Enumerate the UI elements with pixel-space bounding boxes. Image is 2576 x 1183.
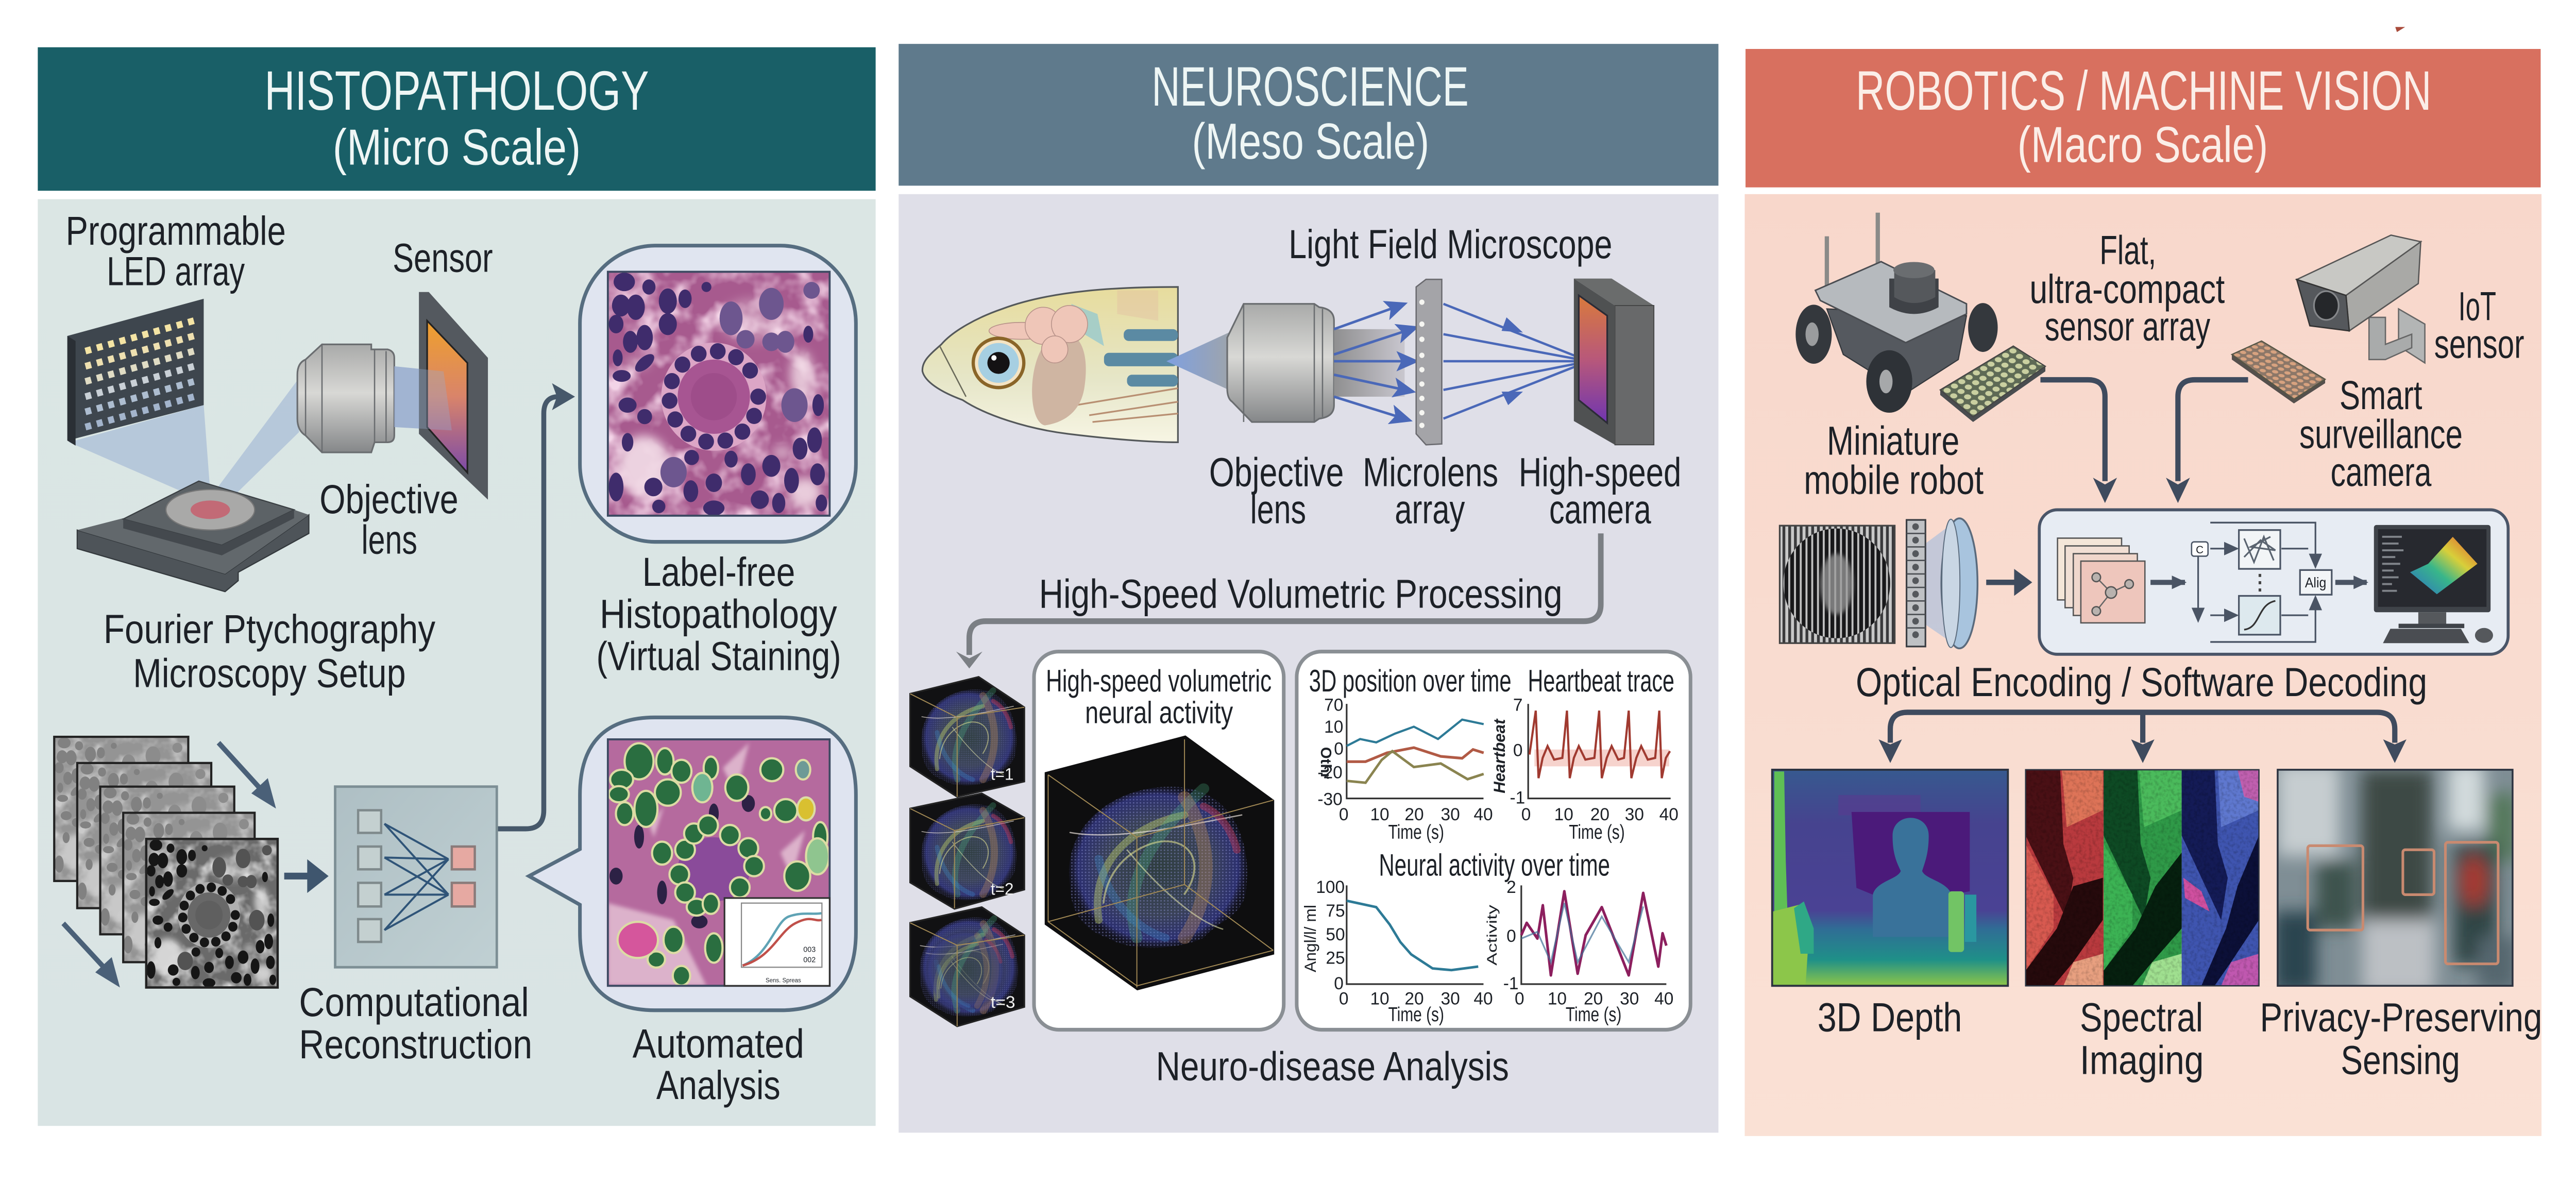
label: label-free histopathology: (Virtual Staining) — [597, 634, 841, 679]
labels: output modalities: 3D Depth — [1818, 995, 1962, 1040]
small stray mark — [2395, 27, 2405, 32]
volume t=1: t=1 — [991, 765, 1013, 784]
label: fourier ptychography setup: Fourier Ptychography — [104, 607, 435, 652]
volume t=1 — [910, 677, 1024, 797]
pipeline flow — [2150, 522, 2367, 642]
chart: heartbeat trace: Heartbeat trace — [1528, 664, 1674, 698]
label: fourier ptychography setup — [104, 607, 435, 696]
label: light field microscope: Light Field Microscope — [1289, 222, 1612, 267]
chart: heartbeat trace — [1490, 664, 1679, 843]
arrow: encoder to decoder — [1986, 569, 2032, 596]
arrows: decoding outputs — [1878, 713, 2406, 763]
icon: miniature mobile robot — [1795, 213, 1998, 413]
inset chart — [724, 898, 829, 986]
chart: heartbeat trace: 10 — [1554, 805, 1573, 824]
inset chart: 002 — [803, 956, 816, 964]
chart: 3D position over time: 40 — [1473, 805, 1493, 824]
labels: output modalities: Sensing — [2341, 1038, 2460, 1083]
image: 3D depth map — [1772, 770, 2008, 986]
chart: 3D position over time — [1309, 664, 1512, 843]
chart: neural activity right: 40 — [1654, 989, 1673, 1008]
chart: neural activity left: 50 — [1326, 924, 1345, 944]
label: programmable LED array — [66, 209, 286, 294]
label: IoT sensor: sensor — [2434, 322, 2524, 367]
card: high-speed volumetric neural activity: High-speed volumetric — [1046, 664, 1272, 698]
heading: neuroscience: NEUROSCIENCE — [1151, 55, 1469, 117]
chart: neural activity left: Time (s) — [1388, 1004, 1444, 1026]
card: time-series charts — [1297, 652, 1690, 1029]
label: flat ultra-compact sensor array — [2029, 228, 2225, 349]
label: objective lens: Objective — [319, 477, 459, 522]
label: programmable LED array: Programmable — [66, 209, 286, 254]
label: fourier ptychography setup: Microscopy Setup — [133, 651, 406, 696]
icon: robot sensor array — [1940, 346, 2045, 422]
ellipsis dots — [2259, 574, 2260, 593]
arrow: camera to volumes — [956, 533, 1601, 668]
label: flat ultra-compact sensor array: sensor array — [2045, 305, 2210, 349]
image: spectral imaging strips — [2026, 770, 2259, 986]
icon: monitor with 3D surface — [2374, 525, 2493, 643]
image: segmented tissue — [608, 739, 829, 986]
inset chart: Sens. Spreas — [766, 977, 801, 984]
icon: sensor — [394, 292, 488, 500]
chart: neural activity right: 20 — [1584, 989, 1603, 1008]
labels: output modalities: Imaging — [2080, 1038, 2204, 1083]
label: label-free histopathology: Histopathology — [600, 592, 837, 637]
heading: histopathology: (Micro Scale) — [333, 119, 581, 176]
label: automated analysis — [633, 1022, 804, 1108]
chart: 3D position over time: Time (s) — [1388, 821, 1444, 843]
heading: robotics / machine vision — [1745, 49, 2540, 188]
chart: neural activity left: 75 — [1326, 901, 1345, 921]
card: high-speed volumetric neural activity: neural activity — [1085, 695, 1233, 730]
panel background — [38, 199, 876, 1126]
label: smart surveillance camera: Smart — [2340, 373, 2422, 418]
label: computational reconstruction — [299, 980, 532, 1067]
labels: optical components: lens — [1250, 487, 1306, 532]
label: programmable LED array: LED array — [107, 249, 245, 294]
panel: robotics and machine vision — [1744, 49, 2542, 1136]
labels: optical components: Microlens — [1363, 450, 1498, 495]
panel: virtual stained histology callout — [580, 246, 856, 542]
chart: 3D position over time: Othr — [1317, 747, 1333, 779]
chart: neural activity left: 40 — [1473, 989, 1493, 1008]
chart: 3D position over time: 10 — [1370, 805, 1389, 824]
chart: heartbeat trace: 30 — [1625, 805, 1644, 824]
label: IoT sensor: IoT — [2459, 284, 2496, 329]
diagram: beams to microlens and camera — [1334, 279, 1589, 445]
arrows: scan direction — [63, 743, 276, 988]
icon: surveillance camera — [2297, 235, 2425, 363]
volume t=2: t=2 — [991, 880, 1013, 898]
chart: 3D position over time: 0 — [1334, 739, 1344, 759]
chart: neural activity right: 10 — [1548, 989, 1567, 1008]
chart: heartbeat trace: 40 — [1659, 805, 1679, 824]
icon: objective lens — [1227, 304, 1334, 422]
icon: high-speed camera — [1574, 279, 1654, 445]
chart: 3D position over time: 10 — [1324, 717, 1343, 737]
image: privacy-preserving blurred scene — [2274, 763, 2517, 994]
chart: neural activity left: Angl/l/ ml — [1301, 905, 1319, 972]
card: high-speed volumetric neural activity — [1034, 652, 1284, 1029]
diagram: optical encoder — [1780, 518, 1977, 648]
diagram: computational reconstruction network — [335, 787, 497, 967]
chart: 3D position over time: 70 — [1324, 695, 1343, 715]
label: sensor: Sensor — [393, 236, 493, 281]
chart: heartbeat trace: 7 — [1513, 695, 1522, 715]
stage algorithm — [2300, 570, 2332, 595]
illustration: zebrafish — [922, 287, 1178, 442]
label: smart surveillance camera: camera — [2331, 450, 2432, 495]
chart: neural activity right: Activity — [1484, 905, 1500, 966]
stage C — [2192, 542, 2208, 556]
labels: output modalities — [1818, 995, 2542, 1083]
label: automated analysis: Analysis — [656, 1063, 781, 1108]
labels: output modalities: Spectral — [2080, 995, 2203, 1040]
volume t=3 — [910, 907, 1024, 1026]
stage algorithm: Alig — [2305, 574, 2326, 590]
icon: light cone into objective — [1166, 332, 1229, 390]
coded captures stack — [2058, 538, 2145, 623]
icon: sample stage — [77, 481, 309, 592]
label: label-free histopathology — [597, 550, 841, 679]
icon: LED array with light cones — [67, 299, 299, 500]
label: miniature mobile robot — [1804, 419, 1984, 503]
chart: 3D position over time: -20 — [1317, 763, 1343, 782]
heading: neuroscience — [899, 44, 1718, 185]
chart: neural activity left: 0 — [1334, 973, 1344, 993]
labels: optical components: camera — [1549, 487, 1651, 532]
label: smart surveillance camera: surveillance — [2299, 412, 2463, 457]
chart: neural activity right — [1484, 877, 1673, 1026]
chart: heartbeat trace: 0 — [1521, 805, 1531, 824]
arrow: robot array to decoder — [2040, 380, 2117, 503]
chart: neural activity right: 0 — [1515, 989, 1524, 1008]
chart: neural activity left: Neural activity over time — [1379, 848, 1610, 883]
chart: 3D position over time: 20 — [1404, 805, 1424, 824]
label: neuro-disease analysis: Neuro-disease Analysis — [1156, 1044, 1509, 1089]
panel background — [899, 194, 1718, 1133]
panel: neuroscience — [899, 44, 1718, 1133]
icon: objective lens — [297, 344, 394, 452]
chart: heartbeat trace: Heartbeat — [1490, 718, 1509, 793]
heading: neuroscience: (Meso Scale) — [1192, 113, 1429, 170]
labels: optical components — [1209, 450, 1681, 532]
label: smart surveillance camera — [2299, 373, 2463, 495]
chart: 3D position over time: 0 — [1339, 805, 1348, 824]
chart: 3D position over time: -30 — [1317, 789, 1343, 809]
labels: optical components: High-speed — [1519, 450, 1681, 495]
chart: neural activity right: 0 — [1506, 926, 1516, 946]
chart: neural activity left: 30 — [1441, 989, 1460, 1008]
chart: neural activity left: 100 — [1316, 877, 1345, 897]
label: IoT sensor — [2434, 284, 2524, 367]
label: flat ultra-compact sensor array: ultra-compact — [2029, 267, 2225, 312]
chart: neural activity right: Time (s) — [1566, 1004, 1621, 1026]
chart: neural activity left: 0 — [1339, 989, 1348, 1008]
panel background — [1744, 194, 2541, 1136]
image: stained tissue — [609, 273, 828, 515]
panel: histopathology — [38, 47, 876, 1126]
stage curve — [2239, 596, 2280, 635]
label: computational reconstruction: Reconstruction — [299, 1022, 532, 1067]
label: miniature mobile robot: mobile robot — [1804, 458, 1984, 503]
volume t=3: t=3 — [991, 992, 1015, 1011]
chart: neural activity left: 25 — [1326, 948, 1345, 968]
heading: histopathology — [38, 47, 876, 191]
stage noise — [2239, 530, 2280, 569]
label: miniature mobile robot: Miniature — [1827, 419, 1959, 464]
chart: neural activity right: 2 — [1506, 877, 1516, 897]
volume time series — [910, 677, 1024, 1026]
stage C: C — [2196, 544, 2204, 556]
chart: 3D position over time: 3D position over time — [1309, 664, 1512, 698]
arrow: camera array to decoder — [2166, 380, 2248, 503]
label: label-free histopathology: Label-free — [642, 550, 795, 595]
chart: neural activity right: -1 — [1503, 973, 1519, 993]
diagram: software decoding pipeline — [2039, 510, 2508, 654]
label: computational reconstruction: Computational — [299, 980, 529, 1025]
volume t=2 — [910, 793, 1024, 909]
volume: large brain activity cube — [1045, 735, 1274, 990]
heading: histopathology: HISTOPATHOLOGY — [264, 59, 649, 122]
chart: heartbeat trace: -1 — [1510, 788, 1525, 808]
icon: camera sensor array — [2232, 341, 2325, 403]
chart: neural activity left — [1301, 848, 1610, 1026]
panel: automated analysis callout — [529, 717, 856, 1010]
labels: optical components: Objective — [1209, 450, 1344, 495]
labels: optical components: array — [1395, 487, 1465, 532]
image stack: raw grayscale captures — [54, 737, 278, 988]
chart: neural activity right: 30 — [1620, 989, 1639, 1008]
chart: heartbeat trace: Time (s) — [1569, 821, 1625, 843]
label: objective lens: lens — [362, 518, 417, 563]
chart: neural activity left: 10 — [1370, 989, 1389, 1008]
label: optical encoding / software decoding: Optical Encoding / Software Decoding — [1856, 660, 2427, 705]
label: high-speed volumetric processing: High-Speed Volumetric Processing — [1039, 571, 1563, 617]
chart: 3D position over time: 30 — [1441, 805, 1460, 824]
label: flat ultra-compact sensor array: Flat, — [2099, 228, 2156, 273]
chart: neural activity left: 20 — [1404, 989, 1424, 1008]
chart: heartbeat trace: 20 — [1590, 805, 1609, 824]
label: objective lens — [319, 477, 459, 563]
inset chart: 003 — [803, 946, 816, 954]
heading: robotics / machine vision: (Macro Scale) — [2018, 116, 2268, 173]
chart: heartbeat trace: 0 — [1513, 740, 1522, 760]
arrow: reconstruction to label-free image — [498, 383, 575, 829]
arrow: stack to reconstruction — [284, 859, 329, 893]
label: automated analysis: Automated — [633, 1022, 804, 1067]
